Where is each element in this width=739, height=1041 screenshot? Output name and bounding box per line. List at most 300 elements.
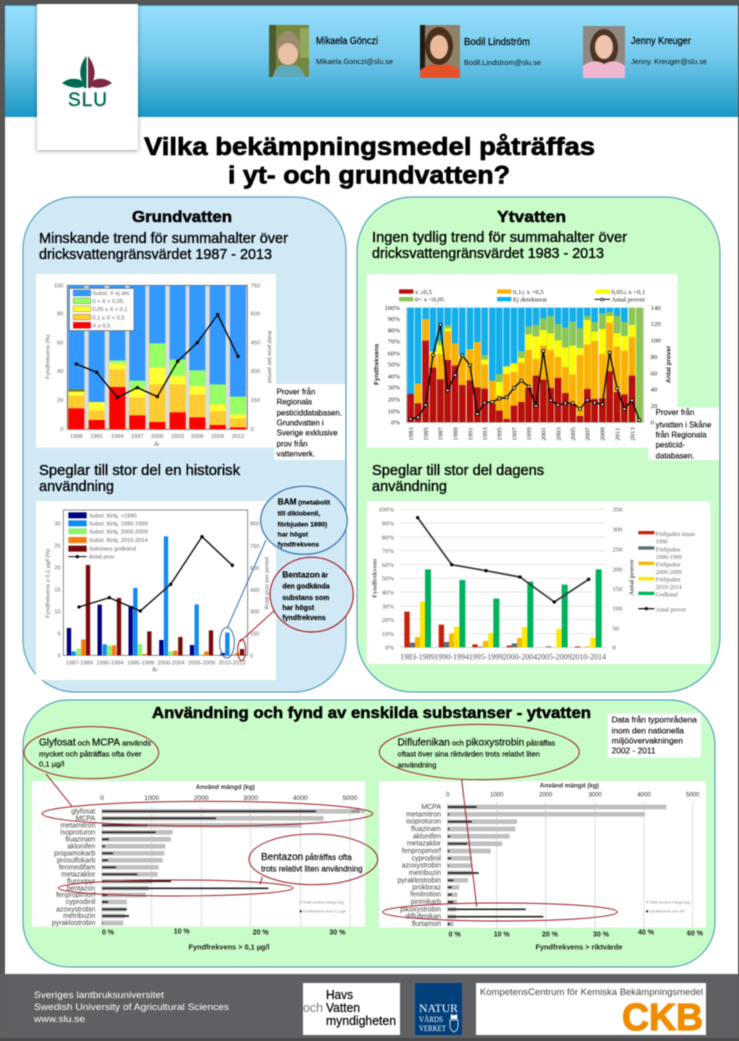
panel: Grundvatten — [23, 197, 353, 692]
author: Bodil Lindström — [420, 25, 541, 78]
header band — [5, 5, 738, 117]
bottom axis — [449, 929, 704, 951]
axes labels: 80% — [388, 327, 400, 334]
logo: SLU: SLU — [68, 90, 107, 111]
row labels — [52, 808, 96, 927]
axes labels: 60% — [382, 562, 394, 569]
logo: SLU — [37, 4, 138, 150]
footer text: SLU: Swedish University of Agricultural Sciences — [34, 1002, 229, 1013]
legend: Förbjuden — [656, 563, 680, 569]
callout: Bentazon: har högst — [282, 605, 315, 612]
note: Prover från: prov från — [277, 440, 308, 449]
logo: Havs och Vattenmyndigheten: Havs — [326, 988, 353, 1002]
right axis labels: 20 — [651, 403, 658, 410]
footer — [0, 974, 739, 1041]
chart: grouped bars Grundvatten — [36, 486, 353, 680]
note: Prover från ytvatten: databasen. — [656, 451, 694, 460]
bottom axis: 0 % — [449, 932, 461, 939]
subheading: Ingen tydlig trend: dricksvattengränsvärdet 1983 - 2013 — [372, 246, 604, 262]
right axis labels: 40 — [651, 387, 658, 394]
right axis labels: 60 — [651, 370, 658, 377]
note: Prover från: vattenverk. — [277, 450, 315, 459]
note: Prover från: Grundvatten i — [277, 419, 324, 428]
axes labels: 10% — [388, 408, 400, 415]
row labels: metribuzin — [409, 870, 441, 877]
heading: Användning och fynd: Användning och fynd av enskilda substanser - ytvatten — [152, 705, 591, 722]
logo: Havs och Vattenmyndigheten: myndigheten — [326, 1014, 396, 1028]
callout: Bentazon: den godkända — [282, 584, 330, 591]
logo: Havs och Vattenmyndigheten: och — [303, 1001, 323, 1015]
photo: Jenny Kreuger — [583, 26, 625, 78]
axes labels: 90% — [382, 520, 394, 527]
axes labels: 0 — [250, 653, 253, 659]
axes labels: 750 — [251, 283, 260, 289]
row labels: aklonifen — [413, 833, 441, 840]
axes labels: Antal prover — [629, 559, 636, 596]
note: Prover från — [274, 384, 345, 460]
callout marker: red ellipse — [238, 610, 275, 661]
legend — [69, 288, 134, 331]
author: Mikaela Gönczi: Mikaela.Gonczi@slu.se — [316, 57, 393, 66]
axes labels: 1991 — [90, 434, 103, 440]
axes labels: 80 — [57, 312, 63, 318]
legend — [638, 531, 695, 614]
axes labels: 0 — [60, 427, 63, 433]
row labels: azoxystrobin — [402, 863, 441, 870]
author: Bodil Lindström: Bodil Lindström — [464, 36, 530, 48]
axes labels: 1995-1999 — [127, 660, 154, 666]
legend: Subst. förbj. 2010-2014 — [89, 538, 148, 544]
axes labels: 300 — [612, 526, 623, 533]
axes labels: 10% — [382, 631, 394, 638]
author: Bodil Lindström: Bodil.Lindstrom@slu.se — [464, 58, 541, 67]
top axis: 0 — [100, 795, 104, 802]
axes labels: 40 — [57, 369, 63, 375]
top axis: 2000 — [539, 793, 553, 799]
axes labels: 2005-2009 — [188, 660, 215, 666]
callout: Diflufenikan och pikoxystrobin: oftast över sina riktvärden trots relativt liten — [398, 750, 540, 759]
right axis labels: 80 — [651, 354, 658, 361]
logo: Havs och Vattenmyndigheten — [303, 983, 400, 1035]
legend: 2000-2009 — [656, 570, 682, 576]
axes labels: 1994 — [111, 434, 124, 440]
author: Jenny Kreuger — [583, 26, 707, 78]
top axis: 1000 — [144, 795, 159, 802]
photo: Bodil Lindström — [420, 25, 460, 78]
axes labels: 1983 — [408, 427, 415, 441]
chart: stacked bars Ytvatten — [367, 274, 719, 460]
legend: 1990-1999 — [656, 555, 682, 561]
subheading: Speglar dagens: användning — [372, 479, 447, 495]
axes labels: 1993 — [482, 427, 489, 441]
row labels: azoxystrobin — [56, 906, 95, 913]
axes labels: 200 — [612, 566, 623, 573]
axes labels: 600 — [251, 312, 260, 318]
axes labels: 450 — [250, 588, 259, 594]
note: Data från typområdena: Data från typområdena — [612, 715, 697, 725]
title — [144, 133, 595, 190]
row labels: fluazinam — [411, 826, 441, 833]
logo: Naturvårdsverket — [415, 983, 462, 1035]
subheading: Speglar historisk: användning — [39, 479, 114, 495]
logo: Havs och Vattenmyndigheten: Vatten — [326, 1001, 360, 1015]
axes labels: 1989 — [452, 427, 459, 441]
axes labels: 90% — [388, 316, 400, 323]
axes labels: 1987 — [438, 427, 445, 441]
axes labels: 2009 — [600, 427, 607, 441]
legend: Subst. förbj. 2000-2009 — [89, 529, 148, 535]
legend: Förbjuden — [656, 577, 680, 583]
axes labels: 2000-2004 — [157, 660, 185, 666]
row labels: flurtamon — [412, 921, 441, 928]
callout: Diflufenikan och pikoxystrobin: användning — [398, 760, 436, 769]
axes labels — [45, 521, 271, 673]
note: Prover från ytvatten: pesticid- — [656, 440, 685, 449]
callout marker: blue ellipse — [220, 540, 266, 658]
subheading: Minskande trend: dricksvattengränsvärdet 1987 - 2013 — [39, 247, 272, 263]
axes labels: 300 — [250, 610, 259, 616]
note: Data från typområdena: 2002 - 2011 — [612, 745, 656, 755]
right axis labels: 0 — [651, 420, 655, 427]
bottom axis: 30 % — [593, 932, 610, 939]
axes labels: 1983-1989 — [400, 653, 435, 662]
logo: Naturvårdsverket: VÅRDS — [419, 1014, 443, 1024]
logo: Naturvårdsverket: VERKET — [419, 1023, 447, 1033]
row labels: glyfosat — [71, 808, 95, 815]
legend: Totalt använd mängd (kg) — [303, 900, 344, 904]
legend: Ej detekterat — [513, 297, 547, 304]
line: antal prov — [76, 315, 238, 397]
row labels: metazaklor — [407, 841, 442, 848]
legend: X ≥ 0,5 — [92, 324, 110, 330]
highlight: pikoxystrobin and diflufenikan — [383, 903, 617, 921]
author: Jenny Kreuger: Jenny Kreuger — [631, 36, 692, 47]
legend: 0,05 ≤ X < 0,1 — [92, 307, 128, 313]
callout: BAM: till diklobenil, — [278, 511, 320, 518]
callout: Bentazon påträffas: Bentazon — [261, 852, 303, 863]
axes labels: 1997 — [131, 434, 144, 440]
axes labels: 40% — [388, 373, 400, 380]
title: Vilka bekämpningsmedel påträffas — [144, 133, 595, 161]
legend: 0 < X < 0,05 — [92, 299, 123, 305]
note: Prover från: Prover från — [277, 388, 315, 397]
row labels: pyraklostrobin — [398, 877, 441, 884]
chart: Fyndfrekvens > riktvärde — [379, 713, 706, 951]
axes labels: 0% — [385, 645, 394, 652]
top axis: 3000 — [243, 795, 258, 802]
top axis: 3000 — [588, 793, 602, 799]
panel: Användning och fynd — [23, 700, 715, 967]
axes labels: 350 — [612, 507, 623, 514]
row labels: propamokarb — [54, 850, 95, 857]
axes labels: 2009 — [211, 434, 224, 440]
legend: Substans godkänd — [89, 547, 136, 553]
axes labels: 100 — [612, 606, 623, 613]
note: Prover från ytvatten: från Regionala — [656, 430, 707, 439]
row labels: metazaklor — [61, 871, 96, 878]
axes labels: 2003 — [555, 427, 562, 441]
row labels: prosulfokarb — [57, 857, 95, 864]
bottom axis: 10 % — [174, 929, 190, 936]
axes labels: 2010-2013 — [218, 660, 246, 666]
axes labels: 2012 — [232, 434, 244, 440]
axes labels: 15 — [54, 587, 61, 593]
bottom axis: 60 % — [687, 930, 704, 937]
legend: Förbjuden innan — [656, 532, 695, 538]
callout: Bentazon: Bentazon — [282, 569, 320, 579]
row labels: MCPA — [421, 804, 441, 811]
callout: Glyfosat och MCPA: 0,1 µg/l — [39, 760, 65, 769]
axes labels: 2007 — [585, 427, 592, 441]
axes labels: 2000-2004 — [503, 653, 537, 662]
axes labels: 100 — [54, 283, 63, 289]
callout: BAM: har högst — [278, 532, 309, 539]
callout: Glyfosat och MCPA: ochMCPAanvänds — [78, 738, 151, 749]
bottom axis — [102, 929, 346, 951]
callout: Diflufenikan och pikoxystrobin: ochpikoxystrobinpåträffas — [452, 738, 555, 749]
axes labels: 0 — [612, 645, 616, 652]
axes labels: 2005-2009 — [537, 653, 572, 662]
chart: Fyndfrekvens > 0,1 µg/l: 6378 kg — [351, 810, 364, 814]
axes labels: Antal prov per period — [266, 330, 272, 383]
callout: Bentazon — [270, 557, 353, 632]
row labels: metamitron — [406, 811, 441, 818]
subheading: Ingen tydlig trend: Ingen tydlig trend för summahalter över — [372, 230, 627, 246]
heading: Ytvatten: Ytvatten — [497, 209, 566, 226]
axes labels: 1990-1994 — [434, 653, 469, 662]
axes labels: Antal prov per period — [265, 557, 271, 610]
legend: Subst. förbj. <1990 — [89, 513, 137, 519]
axes labels: 10 — [54, 610, 61, 616]
axes labels: 50% — [388, 362, 400, 369]
right axis labels: 100 — [651, 337, 661, 344]
legend: Fyndfrekvens över 0,1 µg/l — [303, 910, 346, 914]
bottom axis: 20 % — [253, 929, 269, 936]
callout: Bentazon påträffas — [249, 834, 378, 885]
callout: BAM — [261, 486, 347, 554]
callout: Glyfosat och MCPA: mycket och påträffas ofta över — [39, 750, 142, 759]
callout: Diflufenikan och pikoxystrobin: Diflufenikan — [398, 738, 450, 749]
legend: Subst. X ej det. — [92, 291, 131, 297]
axes labels: Fyndfrekvens (%) — [45, 334, 51, 379]
note: Prover från: Sverige exklusive — [277, 429, 338, 438]
axes labels: 100% — [384, 305, 400, 312]
axes labels: 100% — [378, 507, 394, 514]
top axis: 5000 — [686, 793, 700, 799]
row labels: fluazinam — [65, 836, 95, 843]
axes labels: 1988 — [70, 434, 83, 440]
note: Prover från: Regionala — [277, 398, 313, 407]
axes labels: 20 — [54, 565, 61, 571]
legend: Godkänd — [656, 593, 678, 599]
axes labels: 50 — [612, 626, 620, 633]
author: Jenny Kreuger: Jenny. Kreuger@slu.se — [631, 57, 707, 66]
axes labels: 5 — [58, 631, 61, 637]
chart: stacked bars Ytvatten: Fyndfrekvens — [373, 343, 380, 385]
subheading: Speglar dagens: Speglar till stor del dagens — [372, 463, 544, 479]
row labels: cyprodinil — [411, 855, 441, 862]
row labels: fenpropimorf — [56, 892, 95, 899]
axes labels: 2003 — [171, 434, 184, 440]
author: Mikaela Gönczi: Mikaela Gönczi — [316, 36, 378, 47]
callout: BAM: fyndfrekvens — [278, 542, 319, 549]
axes labels: År — [152, 666, 158, 673]
row labels: prokloraz — [412, 884, 441, 891]
legend: 1990 — [656, 540, 668, 546]
legend: Antal prov — [89, 555, 115, 561]
panel: Ytvatten — [357, 197, 720, 692]
legend: 0,05≤ x <0,1 — [611, 289, 645, 296]
row labels: metamitron — [60, 822, 95, 829]
note: Data från typområdena: miljöövervakningen — [612, 736, 683, 746]
right axis labels — [651, 305, 661, 427]
chart: stacked bars Ytvatten: Antal prover — [666, 345, 673, 383]
row labels: pikoxystrobin — [400, 906, 441, 913]
legend — [399, 289, 646, 304]
callout: Glyfosat och MCPA: Glyfosat — [39, 738, 76, 749]
legend: 0,1 ≤ X < 0,5 — [92, 315, 125, 321]
row labels: fluroxipyr — [67, 878, 96, 885]
axes labels: 80% — [382, 534, 394, 541]
highlight: bentazon — [58, 880, 293, 896]
subheading: Minskande trend: Minskande trend för summahalter över — [39, 231, 288, 247]
axes labels: 25 — [54, 543, 61, 549]
line: antal prover — [411, 325, 639, 420]
heading: Grundvatten: Grundvatten — [132, 209, 232, 226]
axes labels — [372, 507, 636, 662]
subheading: Speglar historisk: Speglar till stor del en historisk — [39, 463, 241, 479]
axes labels: 750 — [250, 544, 259, 550]
footer text: SLU: Sveriges lantbruksuniversitet — [34, 990, 164, 1001]
note: Prover från ytvatten: Prover från — [656, 408, 694, 417]
legend: x ≥0,5 — [415, 289, 433, 296]
callout: Bentazon: substans som — [282, 595, 329, 602]
legend: Subst. förbj. 1990-1999 — [89, 521, 148, 527]
axes labels: 150 — [612, 586, 623, 593]
note: Prover från: pesticiddatabasen. — [277, 409, 342, 418]
axes labels: 2010-2014 — [571, 653, 606, 662]
chart: Fyndfrekvens > 0,1 µg/l — [24, 727, 378, 951]
callout: BAM: (metabolit — [298, 499, 331, 506]
axes labels: 70% — [382, 548, 394, 555]
axes labels: 0 — [251, 427, 254, 433]
callout: Diflufenikan och pikoxystrobin — [379, 724, 579, 907]
axes labels: 450 — [251, 340, 260, 346]
logo: CKB: CKB — [622, 997, 703, 1039]
axes labels: 2006 — [191, 434, 204, 440]
chart: grouped bars Ytvatten — [367, 501, 711, 664]
right axis labels: 140 — [651, 305, 661, 312]
callout: Bentazon påträffas: trots relativt liten användning — [261, 864, 363, 873]
axes labels: 30% — [382, 603, 394, 610]
row labels: fenmedifam — [59, 864, 96, 871]
note: Prover från ytvatten — [648, 407, 719, 460]
legend: Totalt använd mängd (kg) — [649, 900, 690, 904]
row labels: metribuzin — [63, 913, 95, 920]
axes labels: Fyndfrekvens — [372, 558, 379, 598]
axes labels: 1990-1994 — [96, 660, 124, 666]
top axis — [100, 784, 358, 802]
footer text: SLU: www.slu.se — [33, 1014, 85, 1025]
legend — [300, 900, 346, 914]
axes labels: 300 — [251, 369, 260, 375]
axes labels: 1997 — [511, 427, 518, 441]
logo: Naturvårdsverket: NATUR — [419, 1001, 458, 1015]
note: Data från typområdena: inom den nationella — [612, 726, 684, 736]
axes labels: 1995-1999 — [469, 653, 503, 662]
row labels: pirimikarb — [411, 899, 441, 906]
axes labels: 1987-1989 — [66, 660, 93, 666]
legend: Antal prover — [656, 608, 686, 614]
axes labels: 2001 — [541, 427, 548, 441]
axes labels: 30% — [388, 385, 400, 392]
row labels — [398, 804, 442, 928]
axes labels: 150 — [251, 398, 260, 404]
top axis: 4000 — [293, 795, 308, 802]
axes labels: 20% — [382, 617, 394, 624]
row labels: pyraklostrobin — [52, 920, 95, 927]
axes labels: 20% — [388, 396, 400, 403]
axes labels: 1985 — [423, 427, 430, 441]
callout: BAM: förbjuden 1990) — [278, 521, 327, 528]
row labels: fenitrotion — [410, 892, 441, 899]
legend: Förbjuden — [656, 547, 680, 553]
axes labels: År — [153, 441, 161, 448]
bottom axis: 40 % — [638, 929, 655, 936]
axes labels: 1999 — [526, 427, 533, 441]
axes labels: 20 — [57, 398, 63, 404]
bottom axis: 10 % — [494, 932, 510, 939]
top axis: 0 — [446, 793, 450, 799]
author: Mikaela Gönczi — [269, 25, 393, 77]
callout: Bentazon: fyndfrekvens — [282, 615, 326, 622]
top axis: 5000 — [343, 795, 358, 802]
callout: Glyfosat och MCPA — [24, 727, 159, 806]
row labels: aklonifen — [67, 843, 95, 850]
axes labels: 1991 — [467, 427, 474, 441]
legend: 0,1≤ x <0,5 — [513, 289, 544, 296]
note: Prover från ytvatten: ytvatten i Skåne — [656, 420, 711, 429]
axes labels: 0 — [58, 653, 61, 659]
axes labels: 1995 — [497, 427, 504, 441]
axes labels: 40% — [382, 589, 394, 596]
photo: Mikaela Gönczi — [269, 25, 309, 77]
legend: 0< x <0,05 — [415, 297, 445, 304]
top axis: Använd mängd (kg) — [196, 784, 255, 791]
right axis labels: 120 — [651, 321, 661, 328]
axes labels: 600 — [250, 566, 259, 572]
top axis: 2000 — [194, 795, 209, 802]
row labels: MCPA — [76, 815, 96, 822]
legend: Antal prover — [611, 297, 646, 304]
axes labels: 2000 — [151, 434, 164, 440]
axes labels: 2013 — [629, 427, 636, 441]
bottom axis: 0 % — [102, 929, 115, 936]
row labels: diflufenikan — [406, 914, 441, 921]
bottom axis: 20 % — [542, 932, 559, 939]
row labels: fenpropimorf — [402, 848, 441, 855]
line: antal prov — [79, 537, 232, 611]
axes labels — [45, 283, 272, 448]
top axis — [446, 783, 700, 799]
bottom axis: Fyndfrekvens > 0,1 µg/l — [188, 942, 269, 951]
callout: BAM: BAM — [278, 496, 297, 506]
bottom axis: 30 % — [329, 929, 346, 936]
axes labels: 30 — [54, 521, 61, 527]
axes labels: 70% — [388, 339, 400, 346]
axes labels — [384, 305, 636, 441]
legend — [646, 900, 690, 914]
